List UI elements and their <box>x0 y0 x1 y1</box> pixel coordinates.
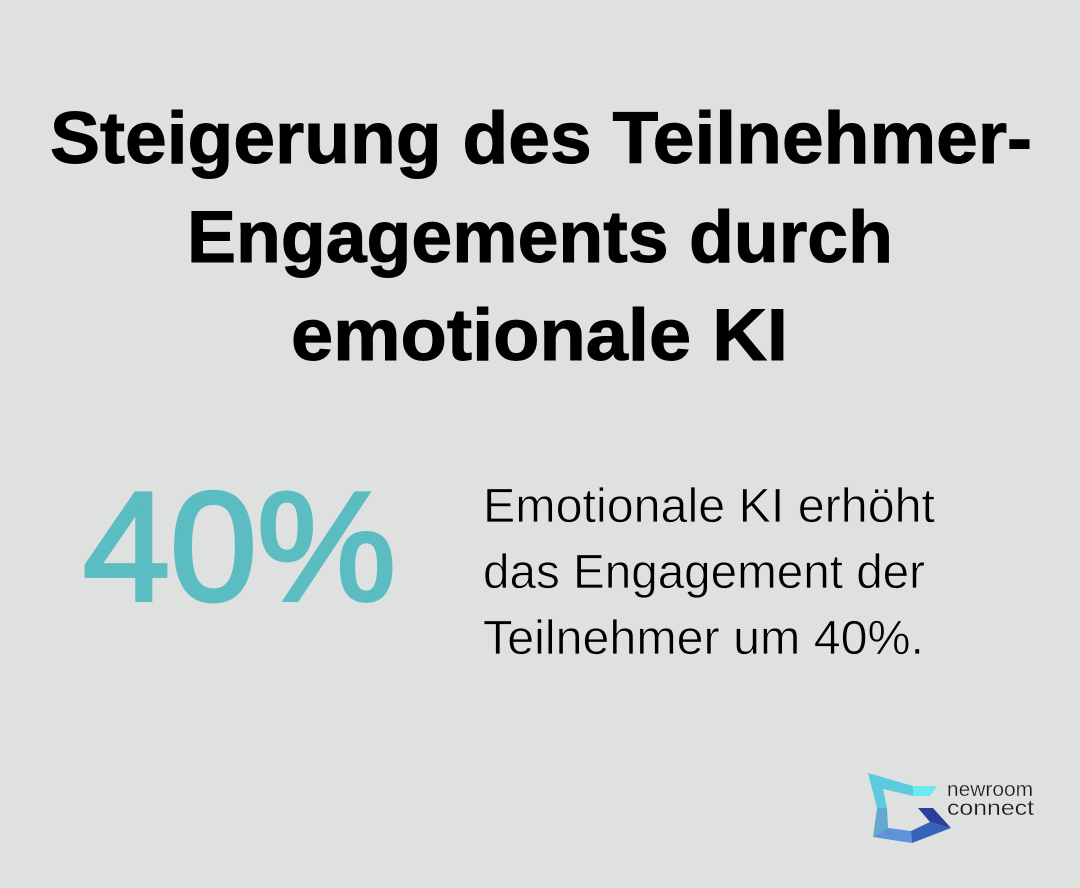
title: Steigerung des Teilnehmer- <box>50 98 1032 179</box>
title: emotionale KI <box>291 295 788 376</box>
title <box>50 98 1032 376</box>
description text: Teilnehmer um 40%. <box>483 612 924 665</box>
logo wordmark <box>947 779 1034 820</box>
title: Engagements durch <box>187 197 893 278</box>
logo icon <box>868 773 951 843</box>
description text: das Engagement der <box>483 546 925 599</box>
logo wordmark: connect <box>947 797 1034 820</box>
description text: Emotionale KI erhöht <box>483 480 935 533</box>
logo wordmark: newroom <box>947 779 1033 801</box>
logo: newroom connect <box>868 773 1034 843</box>
description text <box>483 480 935 665</box>
big statistic: 40%: 40% <box>83 460 396 633</box>
